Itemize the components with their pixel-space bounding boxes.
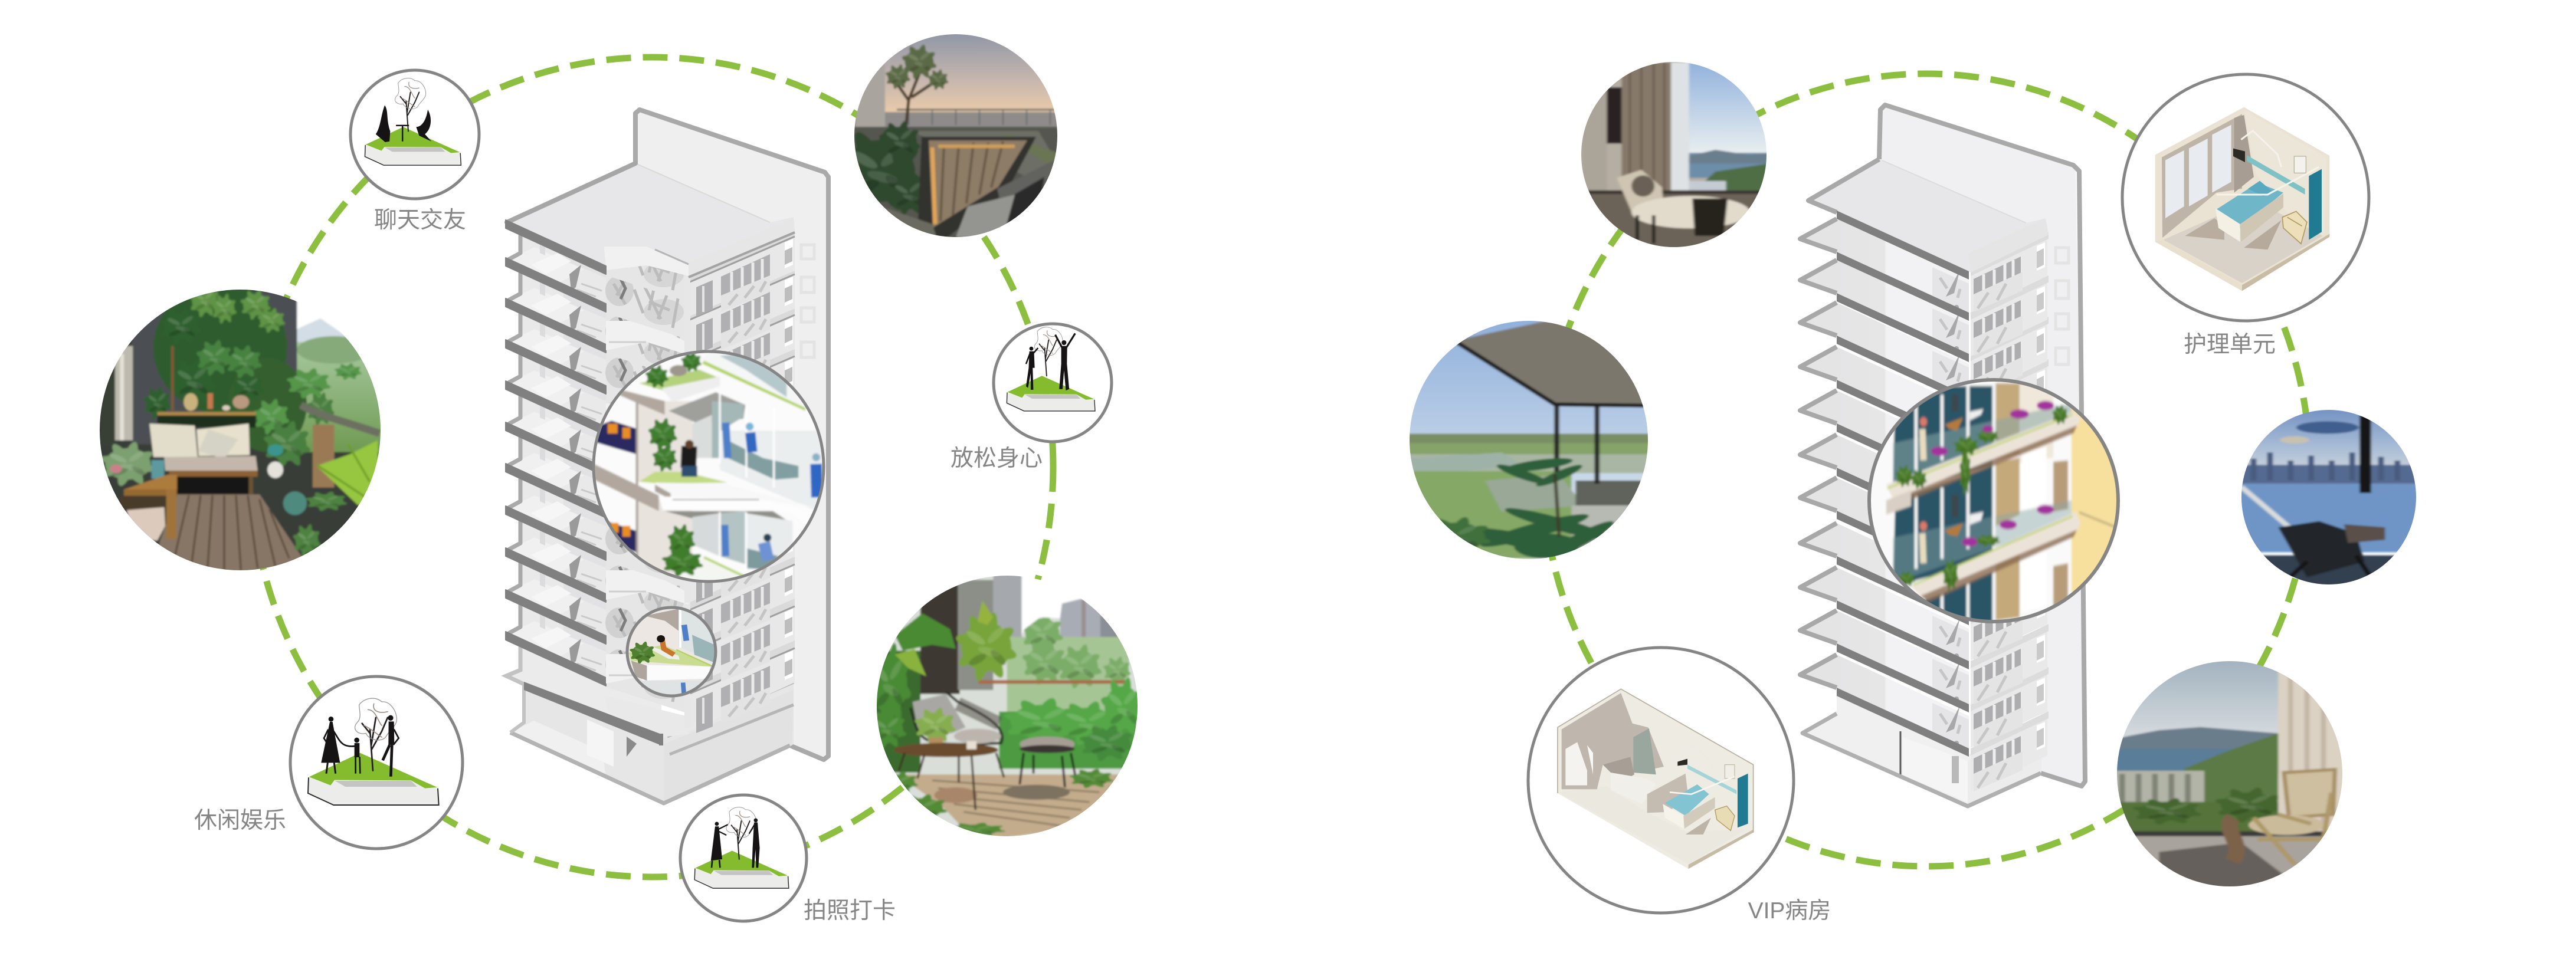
dashed green ring, right bbox=[1543, 74, 2310, 866]
left tower isometric bbox=[506, 110, 838, 803]
label: 聊天交友 bbox=[374, 208, 466, 233]
inset circle: facade with balcony flowers bbox=[1867, 378, 2120, 623]
roof slab bbox=[1808, 159, 2049, 280]
base storey bbox=[510, 678, 794, 803]
roof slab bbox=[506, 163, 795, 277]
photo: coastal view with armchair bbox=[2117, 661, 2342, 886]
room illustration: VIP ward bbox=[1528, 648, 1794, 913]
photo: bedroom lounge chaise with mountain window bbox=[1581, 62, 1767, 247]
left panel: terrace activities diagram bbox=[94, 29, 1149, 924]
label: 休闲娱乐 bbox=[194, 808, 286, 833]
repeated floors bbox=[506, 220, 795, 728]
icon: leisure and recreation family bbox=[290, 676, 463, 849]
dashed green ring, left bbox=[251, 57, 1053, 877]
photo: garden seating with city towers bbox=[877, 576, 1138, 836]
icon: relax body and mind bbox=[994, 324, 1112, 442]
base storey bbox=[1802, 696, 2044, 806]
icon: chat with friends bbox=[350, 70, 479, 199]
icon: photo check-in bbox=[680, 795, 807, 921]
label: 拍照打卡 bbox=[804, 898, 896, 924]
label: VIP病房 bbox=[1748, 898, 1831, 924]
small inset circle: sun lounger bbox=[624, 605, 722, 698]
back wall bbox=[635, 110, 828, 760]
lowest slab bbox=[506, 636, 795, 745]
photo: lush balcony with sofa bbox=[94, 283, 389, 578]
large inset circle: garden terrace with nurses bbox=[592, 350, 825, 583]
label: 放松身心 bbox=[951, 446, 1043, 471]
back wall bbox=[1879, 105, 2085, 786]
right panel: ward and view diagram bbox=[1403, 50, 2430, 924]
repeated floors bbox=[1800, 219, 2049, 792]
photo: rooftop terrace deck at sunset bbox=[854, 34, 1057, 237]
photo: river city view with lounge chair bbox=[2241, 410, 2416, 584]
label: 护理单元 bbox=[2184, 332, 2276, 357]
photo: panoramic window with river and palm bbox=[1403, 318, 1658, 563]
room illustration: nursing unit bbox=[2122, 74, 2369, 321]
right tower isometric bbox=[1800, 105, 2132, 806]
